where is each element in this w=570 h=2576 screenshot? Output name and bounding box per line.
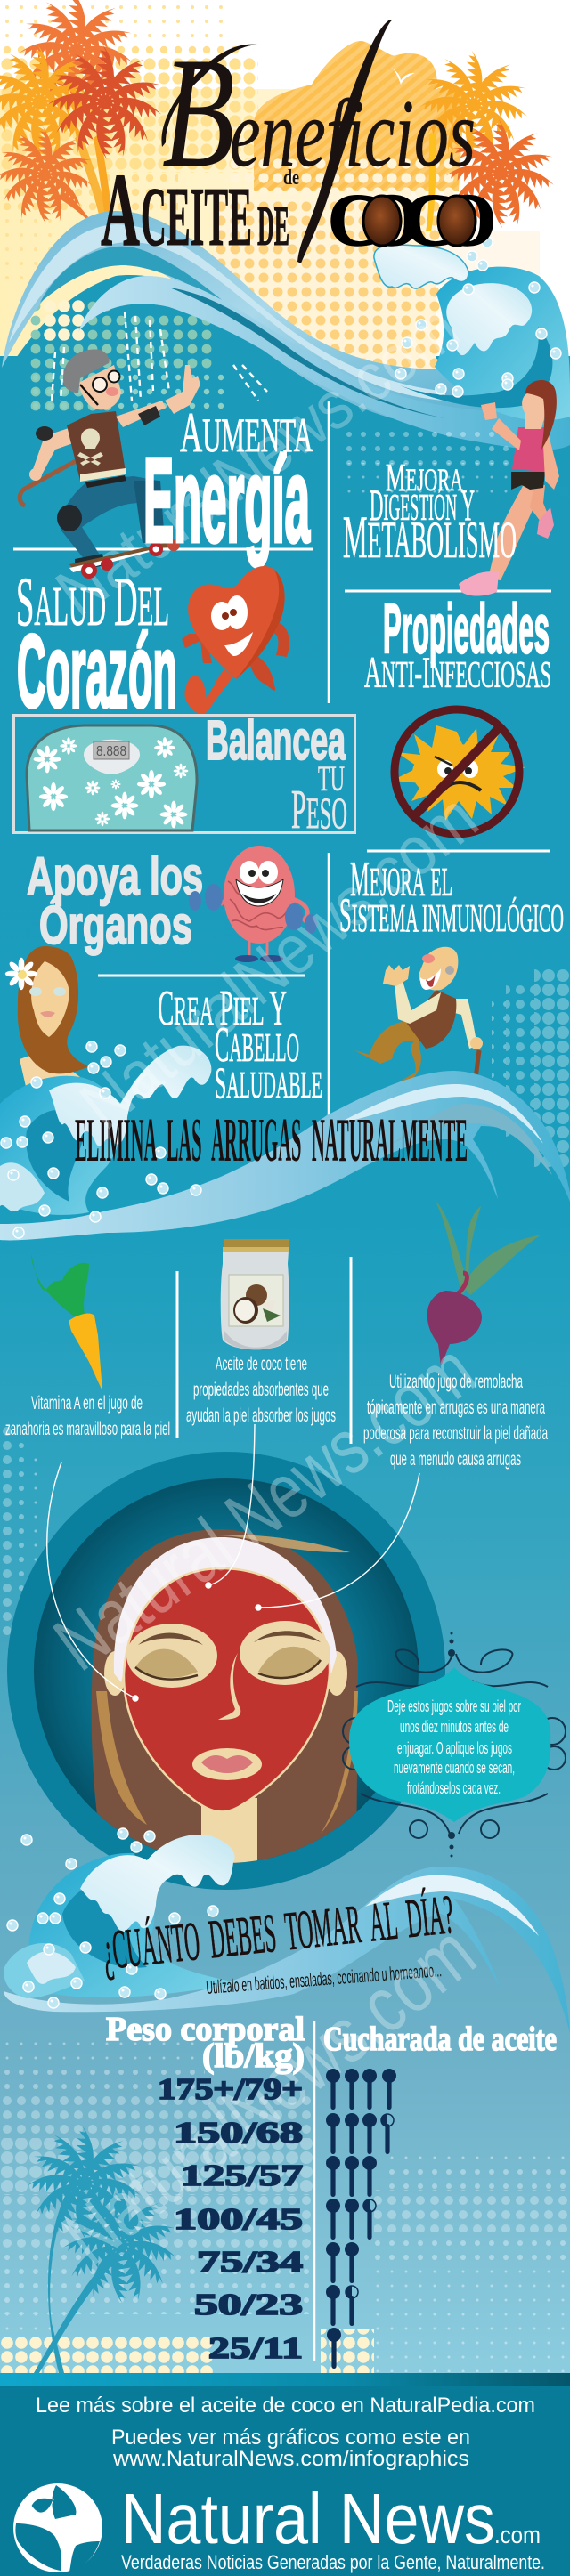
text: Energía [143, 434, 311, 567]
table header: body weight: Peso corporal [106, 2011, 305, 2048]
cane [20, 461, 76, 506]
caption: coconut oil: propiedades absorbentes que [193, 1380, 329, 1400]
heading: Mejora el sistema inmunologico: MEJORA EL [350, 852, 452, 907]
caption: carrot: Vitamina A en el jugo de [31, 1393, 142, 1414]
foam [374, 245, 468, 288]
icon: running heart [182, 566, 289, 714]
icon: beet [428, 1200, 542, 1366]
curl [28, 1853, 240, 1997]
teal halftone behind wave [0, 275, 570, 570]
footer link texts: www.NaturalNews.com/infographics [112, 2447, 469, 2471]
heading: Crea piel y cabello saludable: CREA PIEL Y [158, 981, 287, 1036]
seagull [392, 68, 415, 85]
heading: Aumenta Energia: AUMENTA [180, 401, 313, 464]
hair [92, 1529, 358, 1869]
title: DE [257, 194, 289, 257]
curl body [435, 267, 570, 420]
head [419, 947, 458, 991]
divider lines [13, 401, 551, 2361]
palm trees right [419, 50, 555, 231]
title word: de: de [283, 166, 299, 190]
icon: woman with flower [5, 946, 89, 1090]
heading: Crea piel y cabello saludable: SALUDABLE [215, 1057, 322, 1107]
wave ribbon [4, 1867, 570, 2034]
icon: bathroom scale [27, 725, 197, 830]
watermark 2: NaturalNews.com [65, 778, 492, 1144]
text: Corazón [17, 613, 177, 729]
caption: carrot: zanahoria es maravilloso para la piel [5, 1419, 170, 1439]
title word: COCO with coconuts: COCO [328, 179, 496, 262]
title [101, 20, 496, 268]
heading: Propiedades anti-infecciosas [364, 589, 551, 697]
spoon rows [326, 2069, 396, 2369]
icon: coconut oil jar [221, 1239, 289, 1349]
heading: Balancea tu peso: TU [318, 758, 345, 798]
top wave [2, 211, 570, 450]
palm trees left [0, 0, 162, 224]
ears [104, 1651, 126, 1696]
cane [472, 1050, 479, 1106]
skull [77, 429, 103, 466]
icon: cheerful old man [354, 947, 483, 1106]
wave back band [2, 211, 499, 418]
bubbles [395, 237, 561, 397]
weight values: 50/23 [194, 2288, 303, 2321]
caption: carrot [5, 1393, 170, 1439]
left arm [394, 975, 441, 1024]
heading: Mejora digestion y metabolismo: MEJORA [386, 456, 463, 499]
neck [201, 1798, 257, 1869]
second wave [0, 1041, 570, 1240]
sunny background with halftone [0, 0, 540, 369]
headband [114, 1537, 337, 1682]
halftone dots near runner [343, 427, 512, 498]
wave front band [78, 276, 570, 450]
title word: Beneficios [161, 20, 476, 263]
icon: globe logo [13, 2483, 102, 2572]
face mask [124, 1568, 330, 1811]
heading: Balancea tu peso [206, 710, 347, 840]
heading: Apoya los Organos: Órganos [39, 895, 192, 955]
halftone right of old man [492, 968, 570, 1168]
weight values: 150/68 [174, 2117, 303, 2150]
heading: Mejora el sistema inmunologico [339, 852, 564, 942]
eye patches [126, 1621, 330, 1688]
heading: Mejora digestion y metabolismo: DIGESTIÓN Y [370, 480, 475, 530]
footer link texts [36, 2394, 535, 2471]
heading: Crea piel y cabello saludable: CABELLO [215, 1017, 299, 1073]
right arm [445, 999, 477, 1049]
head [78, 365, 121, 409]
shirt [67, 411, 126, 481]
weight values: 175+/79+ [158, 2073, 303, 2106]
caption: coconut oil: Aceite de coco tiene [216, 1354, 307, 1374]
pants [354, 1022, 421, 1093]
caption: beet [363, 1372, 548, 1470]
footer link texts: Puedes ver más gráficos como este en [111, 2426, 470, 2450]
connector lines [47, 1424, 419, 1701]
heading: Salud del Corazon: SALUD DEL [16, 563, 169, 640]
right arm [116, 401, 166, 427]
dosage table [106, 2011, 557, 2369]
title words: ACEITE DE [101, 151, 289, 268]
callout text [387, 1697, 521, 1797]
caption: coconut oil [186, 1354, 336, 1426]
foam [80, 1835, 234, 1932]
third wave [4, 1828, 570, 2034]
footer link texts: Lee más sobre el aceite de coco en NaturalPedia.com [36, 2394, 535, 2418]
icon: bathroom scale: 8.888 [96, 744, 126, 759]
heading: Apoya los Organos [27, 847, 203, 955]
weight values: 125/57 [181, 2159, 303, 2192]
blue palm trees [27, 2126, 177, 2373]
table header: body weight: (lb/kg) [202, 2037, 305, 2075]
vest [407, 990, 456, 1049]
wave ribbon [0, 1071, 570, 1240]
left arm [32, 427, 73, 476]
logo wordmark: .com [494, 2522, 541, 2548]
panel: balance weight [14, 710, 354, 840]
heading: Balancea tu peso: Balancea [206, 710, 346, 772]
title words: ACEITE DE: CEITE [141, 171, 252, 263]
ornaments [343, 1649, 566, 1838]
panel: ingredients [5, 1200, 548, 1470]
bubbles [7, 1828, 218, 2008]
watermark 1: NaturalNews.com [43, 290, 473, 631]
footer [0, 2373, 570, 2576]
heading: Apoya los Organos: Apoya los [27, 847, 203, 906]
halftone lower section [0, 2038, 570, 2373]
left halftone near carrot caption [0, 1424, 43, 1638]
heading: Salud del Corazon [16, 563, 177, 729]
lips [192, 1748, 262, 1780]
weight values: 75/34 [197, 2246, 303, 2279]
heading: Balancea tu peso: PESO [291, 780, 347, 840]
heading: Crea piel y cabello saludable [158, 981, 322, 1107]
face in circle [7, 1452, 445, 1890]
icon: no germs sign [392, 709, 525, 834]
icon: carrot [31, 1253, 102, 1391]
foam [49, 1046, 211, 1146]
nose [218, 1653, 240, 1720]
table header: body weight [106, 2011, 305, 2075]
caption: coconut oil: ayudan la piel absorber los jugos [186, 1405, 336, 1426]
curl [0, 1076, 121, 1215]
title words: ACEITE DE: A [101, 151, 140, 268]
title word: Beneficios: B [162, 24, 235, 200]
weight values: 100/45 [174, 2203, 303, 2236]
icon: brain with dumbbells [189, 846, 317, 962]
weight values [158, 2073, 303, 2365]
heading: Mejora digestion y metabolismo [343, 456, 517, 571]
legs [61, 476, 159, 565]
shoe and skateboard [75, 554, 105, 571]
bubbles [1, 1041, 201, 1238]
title word: Beneficios: eneficios [230, 81, 476, 187]
logo wordmark: Natural News [121, 2479, 495, 2558]
heading: Aumenta Energia [143, 401, 313, 567]
weight values: 25/11 [208, 2332, 303, 2365]
callout [343, 1632, 566, 1857]
icon: skater grandpa [20, 349, 200, 579]
icon: running woman [459, 380, 559, 596]
